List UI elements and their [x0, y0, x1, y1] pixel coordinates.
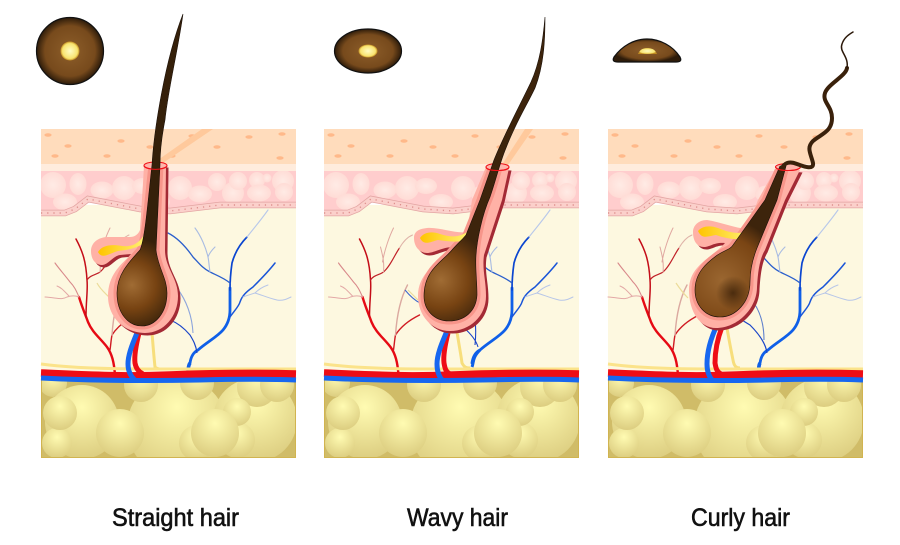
- skin layers: [323, 129, 579, 385]
- label: curly hair: Curly hair: [691, 504, 790, 532]
- hair follicle: [91, 162, 180, 336]
- skin layers: [40, 129, 296, 385]
- subcutaneous fat: [322, 366, 580, 477]
- panel: wavy hair: [322, 17, 580, 477]
- blood vessels: [324, 210, 579, 381]
- hair shaft and bulb: [424, 17, 545, 321]
- blood vessels: [41, 210, 296, 381]
- follicle rim: [776, 168, 800, 170]
- hair follicle: [689, 164, 802, 330]
- icon: curly hair cross section: [613, 39, 681, 62]
- icon: wavy hair cross section: [334, 29, 402, 73]
- label: wavy hair: Wavy hair: [407, 504, 508, 532]
- hair follicle: [414, 163, 512, 334]
- follicle rim: [144, 166, 167, 169]
- panel: curly hair: [606, 32, 864, 477]
- curly hair strand: [781, 32, 853, 170]
- follicle rim: [486, 168, 509, 170]
- subcutaneous fat: [39, 366, 297, 477]
- blood vessels: [608, 210, 863, 381]
- pore streak: [158, 129, 213, 163]
- skin layers: [607, 129, 863, 385]
- hair shaft and bulb: [117, 14, 183, 326]
- label: straight hair: Straight hair: [112, 504, 239, 532]
- subcutaneous fat: [606, 366, 864, 477]
- icon: straight hair cross section: [36, 18, 104, 84]
- dark spot in bulb: [716, 276, 750, 310]
- pore streak: [503, 129, 533, 165]
- hair shaft and bulb: [695, 166, 786, 317]
- panel: straight hair: [36, 14, 297, 477]
